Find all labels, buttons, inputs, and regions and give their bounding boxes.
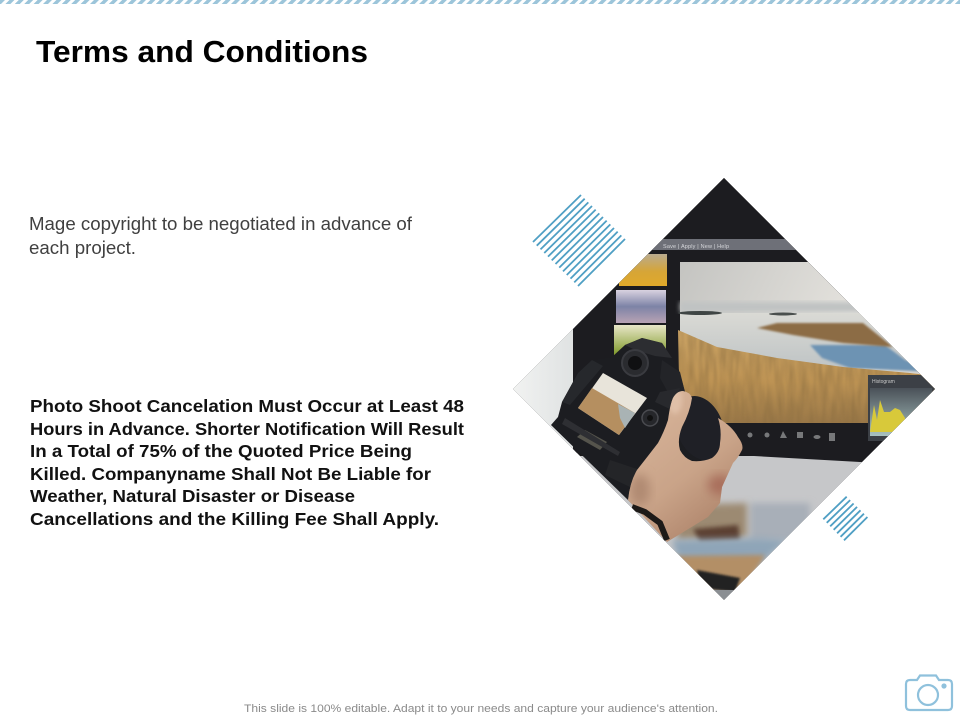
text block: cancelation policy: Weather, Natural Disaster or Disease (30, 486, 355, 506)
camera rear screen (578, 373, 647, 435)
hand holding camera (628, 386, 742, 542)
monitor control icons (748, 431, 835, 441)
photo: camera in front of editing monitor, diamond crop (513, 178, 935, 600)
text block: cancelation policy: In a Total of 75% of the Quoted Price Being (30, 441, 412, 461)
text block: image copyright (29, 213, 413, 258)
top stripe band (0, 0, 960, 4)
footer note: This slide is 100% editable. Adapt it to your needs and capture your audience's attention. (244, 703, 718, 715)
text block: image copyright: each project. (29, 237, 136, 258)
monitor bezel (573, 178, 935, 465)
text block: cancelation policy: Photo Shoot Cancelation Must Occur at Least 48 (30, 396, 464, 416)
toolbar with menu: Save | Apply | New | Help (663, 244, 729, 250)
thumbnails (614, 254, 667, 355)
wall left of monitor (513, 327, 575, 451)
camera body (551, 338, 708, 503)
text block: image copyright: Mage copyright to be negotiated in advance of (29, 213, 413, 234)
text block: cancelation policy: Cancellations and the Killing Fee Shall Apply. (30, 509, 439, 529)
icon: camera (906, 676, 952, 710)
toolbar with menu (652, 239, 796, 250)
bracelet (632, 507, 667, 540)
histogram panel: Histogram (872, 379, 895, 385)
stripe accent: small diamond (823, 497, 867, 540)
text block: cancelation policy: Hours in Advance. Shorter Notification Will Result (30, 419, 464, 439)
text block: cancelation policy: Killed. Companyname Shall Not Be Liable for (30, 464, 431, 484)
title: Terms and Conditions (36, 34, 368, 69)
main landscape image (678, 262, 935, 423)
desk area below monitor (580, 456, 868, 600)
text block: cancelation policy (30, 396, 464, 529)
stripe accent: large diamond (533, 195, 625, 286)
camera lens in hand (691, 396, 722, 458)
histogram panel (868, 375, 935, 441)
